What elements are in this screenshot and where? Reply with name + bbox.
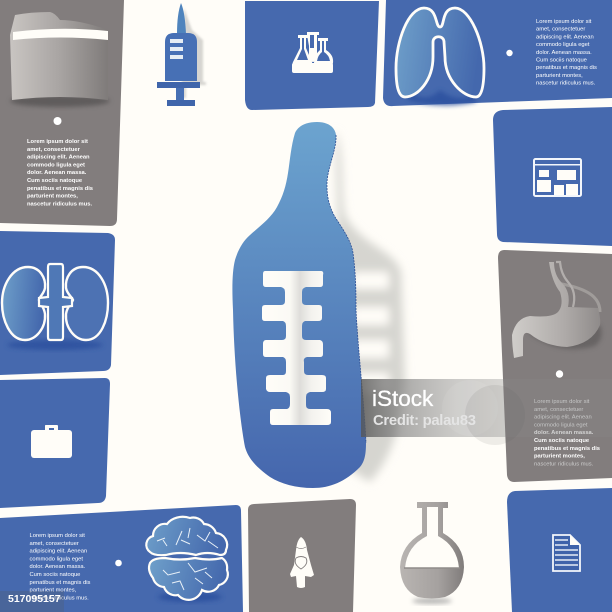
- icon: round flask: [400, 502, 464, 604]
- text block: commodo ligula eget: [536, 42, 590, 48]
- text block: dolor. Aenean massa.: [30, 564, 86, 570]
- bullet dot: [506, 50, 513, 56]
- text block: Lorem ipsum dolor sit: [27, 139, 88, 145]
- watermark logo: iStock: [372, 386, 434, 411]
- icon: thermometer bottle: [232, 122, 366, 488]
- icon: flow chart: [534, 159, 581, 196]
- text block: nascetur ridiculus mus.: [30, 595, 89, 601]
- text block: dolor. Aenean massa.: [534, 430, 594, 436]
- bottle shadow: [335, 130, 405, 482]
- text block: parturient montes,: [30, 588, 77, 594]
- text block: penatibus et magnis dis: [30, 580, 91, 586]
- panel: brain: [0, 505, 243, 612]
- image id: 517095157: [8, 593, 61, 605]
- watermark credit: Credit: palau83: [373, 413, 476, 429]
- text block: Cum sociis natoque: [534, 438, 590, 444]
- panel: flasks: [245, 1, 379, 110]
- text block: amet, consectetuer: [30, 541, 79, 547]
- text block: adipiscing elit. Aenean: [536, 34, 594, 40]
- icon: stomach: [512, 262, 602, 358]
- bullet dot: [556, 370, 563, 378]
- text block: adipiscing elit. Aenean: [534, 415, 592, 421]
- icon: syringe: [157, 3, 206, 106]
- icon: kidneys: [2, 264, 108, 350]
- watermark band: [361, 379, 612, 445]
- text block: adipiscing elit. Aenean: [30, 549, 87, 555]
- icon: folder: [10, 12, 110, 107]
- text block: nascetur ridiculus mus.: [534, 461, 594, 467]
- bullet dot: [54, 117, 62, 125]
- text block: penatibus et magnis dis: [27, 186, 93, 192]
- thermometer scale cut-out: [262, 271, 331, 425]
- text block: commodo ligula eget: [534, 422, 588, 428]
- icon: rocket: [290, 537, 314, 588]
- panel: rocket: [248, 499, 356, 612]
- text block: Lorem ipsum dolor sit: [534, 399, 590, 405]
- text block: amet, consectetuer: [27, 147, 81, 153]
- icon: lab flasks: [292, 32, 333, 73]
- panel: lungs: [383, 0, 612, 106]
- text block: dolor. Aenean massa.: [27, 170, 87, 176]
- text block: adipiscing elit. Aenean: [27, 155, 90, 161]
- text block: penatibus et magnis dis: [536, 65, 597, 71]
- text block: amet, consectetuer: [534, 407, 583, 413]
- text block: parturient montes,: [534, 454, 585, 460]
- text block: nascetur ridiculus mus.: [536, 81, 596, 87]
- icon: document: [553, 535, 580, 571]
- text block: dolor. Aenean massa.: [536, 50, 592, 56]
- panel: document: [507, 488, 612, 612]
- text block: commodo ligula eget: [30, 556, 83, 562]
- text block: Cum sociis natoque: [30, 572, 80, 578]
- text block: Lorem ipsum dolor sit: [536, 19, 592, 25]
- icon: brain: [146, 517, 228, 602]
- panel: chart: [493, 107, 612, 246]
- panel: stomach: [498, 250, 612, 482]
- text block: Cum sociis natoque: [27, 178, 83, 184]
- panel: kidneys: [0, 231, 115, 375]
- text block: commodo ligula eget: [27, 162, 85, 168]
- text block: parturient montes,: [536, 73, 583, 79]
- icon: lungs: [396, 8, 484, 106]
- image id: [0, 591, 64, 612]
- panel: briefcase: [0, 378, 110, 508]
- text block: Lorem ipsum dolor sit: [30, 533, 85, 539]
- text block: amet, consectetuer: [536, 27, 585, 33]
- text block: Cum sociis natoque: [536, 58, 587, 64]
- text block: parturient montes,: [27, 194, 78, 200]
- bullet dot: [115, 560, 122, 566]
- panel: folder: [0, 0, 124, 226]
- text block: nascetur ridiculus mus.: [27, 201, 92, 207]
- icon: briefcase: [31, 425, 72, 458]
- text block: penatibus et magnis dis: [534, 446, 600, 452]
